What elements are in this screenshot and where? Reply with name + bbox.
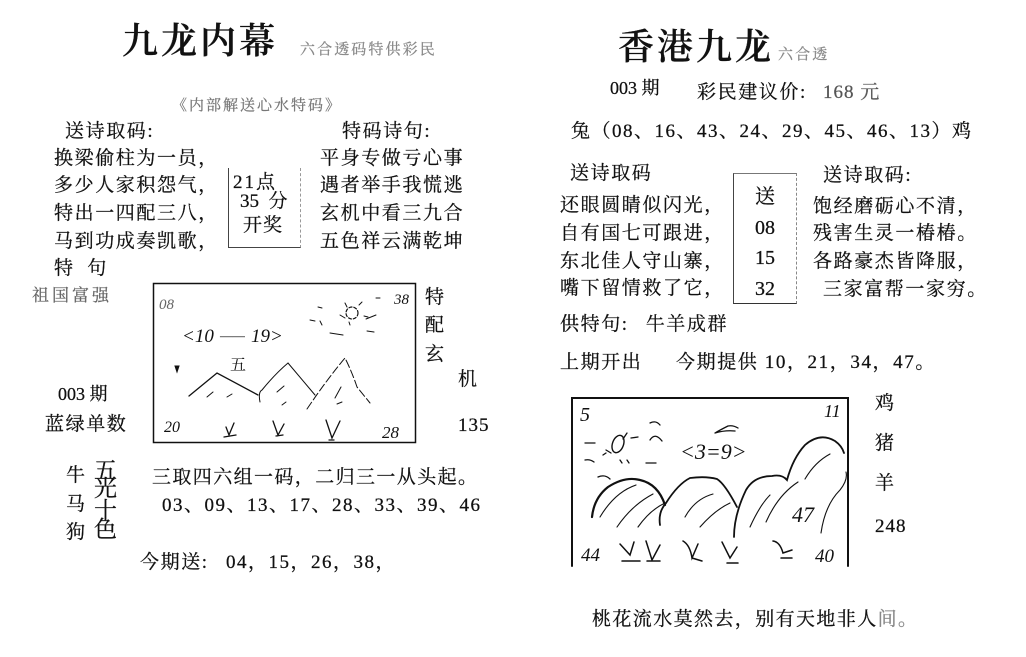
draw time box xyxy=(228,168,301,248)
zodiac list: 马 xyxy=(66,494,87,515)
number box: 送 xyxy=(755,186,775,208)
draw time box: 21点 xyxy=(233,172,277,193)
heading: right poem: 送诗取码: xyxy=(823,165,912,186)
vertical text: 五光十色 xyxy=(94,458,119,542)
chart: right sketch of mountains: 40 xyxy=(815,546,834,567)
vertical label: 特配玄机: 135 xyxy=(458,415,490,436)
vertical label: 特配玄机 xyxy=(425,286,490,436)
number box: 08 xyxy=(755,217,775,239)
panel: right sheet 香港九龙 xyxy=(560,27,988,630)
subtitle: 六合透 xyxy=(778,47,829,63)
chart: right sketch of mountains: 5 xyxy=(580,404,590,426)
number box: 15 xyxy=(755,247,775,269)
draw time box: 开奖 xyxy=(243,215,283,236)
vertical label: 鸡猪羊 xyxy=(875,392,906,537)
special phrase: 祖国富强 xyxy=(32,286,112,305)
label: 蓝绿单数: 蓝绿单数 xyxy=(45,414,127,435)
chart: right sketch of mountains: 44 xyxy=(581,545,600,566)
draw time box: 35 分 xyxy=(240,191,288,212)
subheading: 《内部解送心水特码》 xyxy=(172,98,342,114)
poem: right: 三家富帮一家穷。 xyxy=(823,279,988,300)
poem: right: 玄机中看三九合 xyxy=(320,203,464,224)
chart: left sketch of mountains: 08 xyxy=(159,297,174,313)
chart: left sketch of mountains: 28 xyxy=(382,423,400,442)
poem: right: 残害生灵一椿椿。 xyxy=(813,223,978,244)
suggested price: 彩民建议价: xyxy=(697,82,807,103)
poem: left: 特 句 xyxy=(54,258,108,279)
poem: left xyxy=(560,194,725,299)
vertical label: 鸡猪羊: 248 xyxy=(875,516,906,537)
chart: left sketch of mountains: 38 xyxy=(393,292,410,308)
vertical text: 五光十色: 十 xyxy=(94,498,119,523)
poem: left: 换梁偷柱为一员， xyxy=(54,148,219,169)
last issue: 上期开出 xyxy=(560,352,642,373)
poem: right: 遇者举手我慌逃 xyxy=(320,175,464,196)
vertical text: 五光十色: 五 xyxy=(94,458,119,483)
vertical label: 特配玄机: 玄 xyxy=(425,344,446,365)
rhyme line: 三取四六组一码，二归三一从头起。 xyxy=(152,467,478,488)
vertical label: 特配玄机: 特 xyxy=(425,287,446,308)
poem: right: 饱经磨砺心不清， xyxy=(813,196,978,217)
poem: left: 嘴下留情救了它， xyxy=(560,278,725,299)
chart: right sketch of mountains: 11 xyxy=(824,401,841,421)
poem: right: 平身专做亏心事 xyxy=(320,148,464,169)
poem: right xyxy=(320,148,464,252)
poem: left: 特出一四配三八， xyxy=(54,203,219,224)
number box: 32 xyxy=(755,278,775,300)
title: 九龙内幕: 九龙内幕 xyxy=(122,21,278,61)
chart: left sketch of mountains: <10 xyxy=(182,326,214,347)
issue number: 003 期 xyxy=(58,384,108,404)
heading: left poem: 送诗取码: xyxy=(65,121,154,142)
poem: left: 多少人家积怨气， xyxy=(54,175,219,196)
poem: left: 东北佳人守山寨， xyxy=(560,251,725,272)
chart: left sketch of mountains: 19> xyxy=(251,326,283,347)
vertical text: 五光十色: 光 xyxy=(94,476,119,501)
heading: left poem: 送诗取码 xyxy=(570,163,652,184)
poem: left xyxy=(54,148,219,279)
subtitle: 六合透码特供彩民 xyxy=(300,42,437,58)
special phrase: 供特句: 牛羊成群 xyxy=(560,314,728,335)
poem: right xyxy=(813,196,988,300)
vertical label: 鸡猪羊: 鸡 xyxy=(875,393,896,414)
chart: right sketch of mountains: 47 xyxy=(792,502,815,527)
zodiac numbers: 兔（08、16、43、24、29、45、46、13）鸡 xyxy=(571,121,973,142)
panel: left sheet 九龙内幕 xyxy=(32,21,490,573)
title: 香港九龙: 香港九龙 xyxy=(618,27,774,67)
chart: left sketch of mountains: 20 xyxy=(164,419,180,436)
number: 04 15 26 38: 04，15，26，38， xyxy=(226,552,396,573)
chart: left sketch of mountains: 五 xyxy=(230,356,246,374)
vertical label: 鸡猪羊: 羊 xyxy=(875,473,896,494)
vertical label: 特配玄机: 配 xyxy=(425,315,446,336)
number list: 03、09、13、17、28、33、39、46 xyxy=(162,495,482,516)
chart: left sketch of mountains xyxy=(154,284,416,442)
vertical label: 鸡猪羊: 猪 xyxy=(875,433,896,454)
poem: right: 五色祥云满乾坤 xyxy=(320,231,464,252)
heading: right poem: 特码诗句: xyxy=(342,121,431,142)
this issue numbers: 今期提供 10，21，34，47。 xyxy=(676,352,936,373)
chart: right sketch of mountains xyxy=(572,398,848,567)
this issue label: 今期送: xyxy=(140,552,209,573)
vertical label: 特配玄机: 机 xyxy=(458,369,479,390)
poem: right: 各路豪杰皆降服， xyxy=(813,251,978,272)
issue number: 003 期 xyxy=(610,78,660,98)
poem: left: 还眼圆睛似闪光， xyxy=(560,195,725,216)
closing verse: 桃花流水莫然去，别有天地非人间。 xyxy=(592,609,918,630)
vertical text: 五光十色: 色 xyxy=(94,517,119,542)
number box xyxy=(733,173,797,304)
zodiac list xyxy=(66,465,87,543)
zodiac list: 牛 xyxy=(66,465,87,486)
chart: left sketch of mountains: —— xyxy=(219,329,245,344)
zodiac list: 狗 xyxy=(66,522,87,543)
poem: left: 自有国七可跟进， xyxy=(560,223,725,244)
price value: 168 元 xyxy=(823,82,880,103)
chart: right sketch of mountains: <3=9> xyxy=(680,439,747,464)
poem: left: 马到功成奏凯歌， xyxy=(54,231,219,252)
